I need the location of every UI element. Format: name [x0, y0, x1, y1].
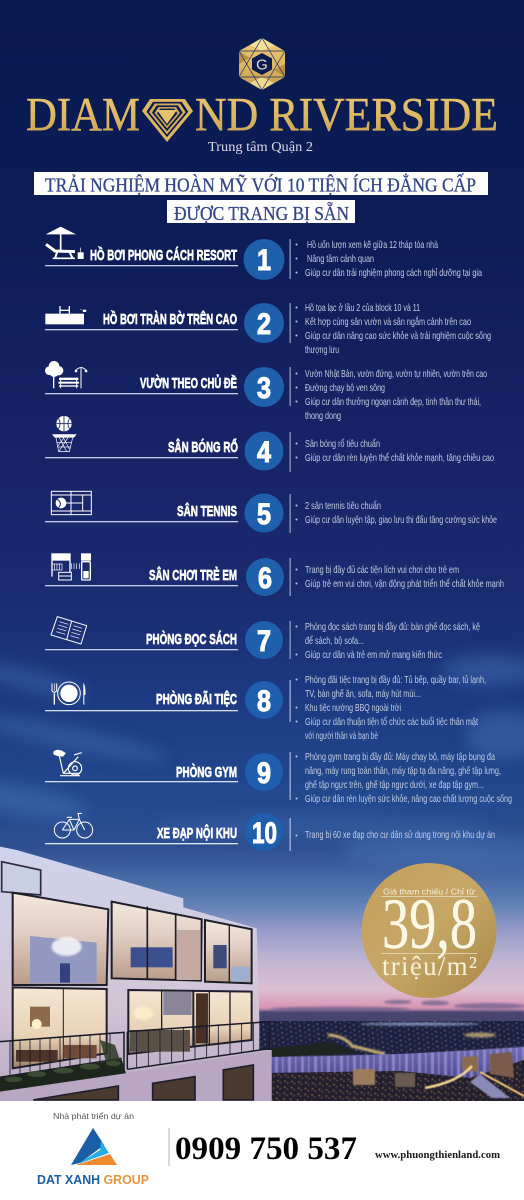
description: Sân bóng rổ tiêu chuẩn: [305, 438, 380, 450]
description: [290, 494, 497, 533]
description: [290, 751, 512, 805]
heading: SÂN CHƠI TRẺ EM: [149, 566, 237, 584]
description: [290, 302, 491, 356]
heading: HỒ BƠI PHONG CÁCH RESORT: [90, 246, 237, 264]
icon: open book: [51, 617, 87, 644]
number badge: [244, 239, 284, 280]
price badge: triệu/m²: [382, 951, 477, 981]
developer label: Nhà phát triển dự án: [53, 1111, 134, 1121]
number badge: 7: [257, 625, 271, 658]
heading: PHÒNG ĐÃI TIỆC: [156, 690, 237, 708]
heading: HỒ BƠI TRÀN BỜ TRÊN CAO: [103, 310, 237, 328]
price badge: Giá tham chiếu / Chỉ từ: [383, 888, 476, 896]
icon: tennis court: [51, 491, 91, 515]
description: Đường chạy bộ ven sông: [305, 382, 385, 394]
website: www.phuongthienland.com: [375, 1150, 500, 1161]
icon: exercise bike: [54, 750, 82, 776]
clouds: [0, 654, 524, 866]
amenity 10: [45, 813, 495, 851]
number badge: 5: [257, 498, 271, 531]
top left window: [2, 862, 41, 895]
heading: SÂN BÓNG RỔ: [168, 438, 238, 456]
number badge: 1: [257, 244, 271, 277]
heading: PHÒNG GYM: [176, 763, 237, 781]
heading banner line 1: TRẢI NGHIỆM HOÀN MỸ VỚI 10 TIỆN ÍCH ĐẲNG CẤP: [45, 174, 476, 196]
description: TV, bàn ghế ăn, sofa, máy hút mùi...: [305, 688, 421, 700]
heading: PHÒNG ĐỌC SÁCH: [146, 630, 237, 648]
amenity 4: [45, 416, 494, 472]
icon: garden tree bench lamp: [45, 361, 87, 388]
window panel large left: [13, 893, 108, 985]
title: Diamond Riverside: ND RIVERSIDE: [195, 88, 498, 142]
heading banner line 2: ĐƯỢC TRANG BỊ SẴN: [174, 203, 349, 225]
icon: basketball hoop: [52, 416, 77, 452]
amenity 9: [45, 750, 512, 805]
description: [290, 367, 487, 422]
amenity 5: [45, 491, 497, 533]
amenity 8: [45, 674, 486, 742]
icon: rooftop infinity pool: [45, 306, 86, 324]
number badge: [244, 432, 284, 470]
number badge: [244, 367, 284, 407]
window panel centre: [112, 902, 202, 981]
description: Hồ uốn lượn xem kẽ giữa 12 tháp tòa nhà: [307, 239, 438, 251]
number badge: [245, 753, 283, 791]
phone number: 0909 750 537: [175, 1131, 357, 1167]
description: [290, 432, 494, 472]
number badge: [245, 621, 283, 659]
number badge: 9: [257, 757, 271, 790]
icon: pool lounger: [46, 227, 84, 259]
number badge: [244, 494, 284, 532]
price badge: [362, 863, 496, 998]
logo: hexagon G emblem: G: [256, 56, 268, 74]
icon: diamond letter O: [142, 99, 193, 142]
number badge: 4: [257, 436, 271, 469]
logo: hexagon G emblem: [239, 38, 285, 90]
icon: bicycle: [54, 813, 93, 838]
description: Hồ tọa lạc ở lầu 2 của block 10 và 11: [305, 302, 420, 314]
horizon and night city view: [258, 1011, 524, 1101]
window panel lower left: [13, 987, 107, 1068]
wall: [0, 847, 272, 1102]
icon: playground: [51, 553, 91, 580]
number badge: [245, 813, 283, 851]
subtitle: Trung tâm Quận 2: [208, 140, 313, 155]
lower floor windows: [33, 1065, 253, 1100]
number badge: 3: [257, 372, 271, 405]
balcony railing: [0, 1022, 269, 1077]
description: [290, 621, 480, 661]
description: với người thân và bạn bè: [305, 730, 378, 742]
logo wordmark: DAT XANH GROUP: [37, 1172, 149, 1187]
amenity 3: [45, 361, 487, 422]
number badge: 2: [257, 308, 271, 341]
building: [0, 847, 272, 1102]
description: thong dong: [305, 410, 341, 422]
amenity 7: [45, 617, 480, 661]
description: Khu tiệc nướng BBQ ngoài trời: [305, 702, 401, 714]
heading: SÂN TENNIS: [177, 502, 237, 520]
description: Trang bị đầy đủ các tiện lích vui chơi cho trẻ em: [305, 564, 459, 576]
river: [272, 1047, 524, 1078]
description: 2 sân tennis tiêu chuẩn: [305, 500, 381, 512]
description: [290, 558, 504, 596]
title: Diamond Riverside: [26, 88, 498, 142]
description: Giúp cư dân và trẻ em mở mang kiến thức: [305, 649, 442, 661]
window panel right: [205, 920, 252, 983]
price badge: 39,8: [382, 884, 477, 964]
number badge: 10: [252, 817, 277, 850]
number badge: 6: [258, 562, 272, 595]
lower wall shade: [0, 1050, 272, 1102]
window panel lower right: [128, 990, 252, 1054]
number badge: [244, 303, 284, 343]
number badge: [246, 558, 284, 596]
icon: plate fork knife: [52, 682, 85, 705]
footer: [0, 1101, 524, 1200]
riverside foreground: [272, 1060, 524, 1101]
amenity 1: [45, 227, 482, 280]
heading: XE ĐẠP NỘI KHU: [157, 824, 237, 842]
description: [290, 239, 482, 279]
logo: Dat Xanh triangle: [71, 1128, 117, 1165]
dusk clouds: [270, 1000, 524, 1012]
description: thượng lưu: [305, 344, 339, 356]
amenity 2: [45, 302, 491, 356]
title: Diamond Riverside: DIAM: [26, 88, 140, 142]
description: [290, 674, 486, 742]
number badge: [245, 681, 283, 719]
planter: [0, 1040, 126, 1092]
amenity 6: [45, 553, 504, 596]
number badge: 8: [257, 685, 271, 718]
description: để sách, bộ sofa...: [305, 635, 364, 647]
heading: VƯỜN THEO CHỦ ĐỀ: [140, 374, 237, 392]
description: Nâng tầm cảnh quan: [307, 253, 374, 265]
